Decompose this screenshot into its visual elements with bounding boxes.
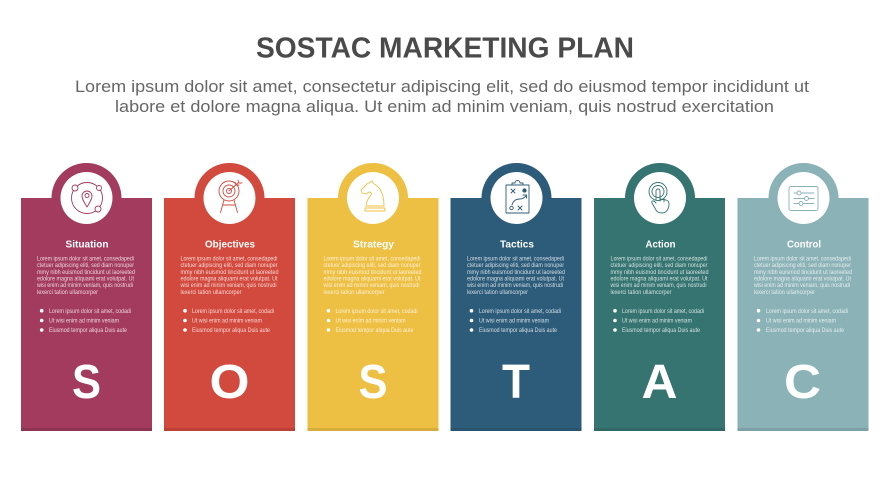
bullet list: Eiusmod tempor aliqua Duis aute <box>49 328 128 334</box>
bullet list: Lorem ipsum dolor sit amet, codadi <box>192 309 274 315</box>
panel: Control <box>738 163 868 431</box>
heading: Strategy: Strategy <box>353 240 394 250</box>
bullet list <box>470 309 561 334</box>
bullet list <box>40 309 131 334</box>
bullet list <box>757 309 848 334</box>
letter T: T <box>502 356 530 409</box>
panel: Objectives <box>164 163 295 431</box>
body text <box>753 256 852 296</box>
bullet list: Ut wisi enim ad minim veniam <box>479 318 549 324</box>
body text: mmy nibh euismod tincidunt ut laoreeted <box>180 270 278 276</box>
bullet list: Eiusmod tempor aliqua Duis aute <box>622 328 701 334</box>
body text: mmy nibh euismod tincidunt ut laoreeted <box>324 270 422 276</box>
icon: clipboard plan <box>506 181 529 213</box>
heading: Situation: Situation <box>66 240 108 250</box>
body text: lexerci tation ullamcorper <box>180 290 242 296</box>
body text: mmy nibh euismod tincidunt ut laoreeted <box>467 270 565 276</box>
subtitle: Lorem ipsum dolor sit amet, consectetur adipiscing elit, sed do eiusmod tempor incididunt ut <box>75 77 809 96</box>
letter S: S <box>358 356 388 409</box>
body text: edolore magna aliquami erat volutpat. Ut <box>467 276 564 282</box>
icon: chess knight <box>361 181 385 211</box>
bullet list <box>183 309 274 334</box>
body text: lexerci tation ullamcorper <box>324 290 384 296</box>
bullet list: Ut wisi enim ad minim veniam <box>49 318 119 324</box>
letter S: S <box>72 356 101 409</box>
body text: lexerci tation ullamcorper <box>467 290 528 296</box>
bullet list: Ut wisi enim ad minim veniam <box>336 318 406 324</box>
body text <box>323 256 422 296</box>
body text <box>466 256 565 296</box>
bullet list: Lorem ipsum dolor sit amet, codadi <box>766 309 848 315</box>
bullet list: Eiusmod tempor aliqua Duis aute <box>479 328 558 334</box>
letter A: A <box>642 356 678 409</box>
icon: location orbit <box>72 182 102 214</box>
body text <box>36 256 135 296</box>
body text: wisi enim ad minim veniam, quis nostrudi <box>753 283 850 289</box>
panel: Strategy <box>308 163 438 431</box>
bullet list: Lorem ipsum dolor sit amet, codadi <box>622 309 704 315</box>
subtitle: labore et dolore magna aliqua. Ut enim ad minim veniam, quis nostrud exercitation <box>115 97 774 116</box>
icon: touch hand <box>649 182 669 213</box>
body text: lexerci tation ullamcorper <box>610 290 672 296</box>
body text: lexerci tation ullamcorper <box>754 290 815 296</box>
body text: wisi enim ad minim veniam, quis nostrudi <box>180 283 276 289</box>
body text: ctetuer adipiscing eliti, sed diam nonuper <box>754 263 851 269</box>
bullet list: Ut wisi enim ad minim veniam <box>766 318 836 324</box>
bullet list <box>327 309 418 334</box>
body text: ctetuer adipiscing eliti, sed diam nonuper <box>610 263 708 269</box>
body text: edolore magna aliquami erat volutpat. Ut <box>754 276 851 282</box>
body text: Lorem ipsum dolor sit amet, consedapedi <box>754 256 851 262</box>
body text <box>610 256 708 296</box>
body text: Lorem ipsum dolor sit amet, consedapedi <box>324 256 420 262</box>
panel: Situation <box>21 163 152 431</box>
bullet list: Lorem ipsum dolor sit amet, codadi <box>49 309 131 315</box>
body text: edolore magna aliquami erat volutpat. Ut <box>37 276 134 282</box>
icon: sliders panel <box>789 186 818 210</box>
body text <box>180 256 278 296</box>
body text: ctetuer adipiscing eliti, sed diam nonuper <box>467 263 564 269</box>
body text: mmy nibh euismod tincidunt ut laoreeted <box>37 270 135 276</box>
body text: mmy nibh euismod tincidunt ut laoreeted <box>610 270 708 276</box>
bullet list: Lorem ipsum dolor sit amet, codadi <box>479 309 561 315</box>
bullet list: Lorem ipsum dolor sit amet, codadi <box>336 309 418 315</box>
body text: ctetuer adipiscing eliti, sed diam nonuper <box>324 263 420 269</box>
heading: Tactics: Tactics <box>500 240 534 250</box>
body text: Lorem ipsum dolor sit amet, consedapedi <box>180 256 278 262</box>
body text: ctetuer adipiscing eliti, sed diam nonuper <box>180 263 278 269</box>
bullet list: Eiusmod tempor aliqua Duis aute <box>766 328 845 334</box>
body text: edolore magna aliquami erat volutpat. Ut <box>610 276 708 282</box>
body text: wisi enim ad minim veniam, quis nostrudi <box>466 283 563 289</box>
heading: Control: Control <box>787 240 821 250</box>
body text: ctetuer adipiscing eliti, sed diam nonuper <box>37 263 134 269</box>
bullet list <box>613 309 704 334</box>
subtitle <box>75 77 809 116</box>
letter C: C <box>784 356 821 409</box>
body text: wisi enim ad minim veniam, quis nostrudi <box>323 283 420 289</box>
bullet list: Ut wisi enim ad minim veniam <box>192 318 262 324</box>
bullet list: Ut wisi enim ad minim veniam <box>622 318 692 324</box>
panel: Tactics <box>450 163 582 431</box>
letter O: O <box>210 356 250 409</box>
title: SOSTAC MARKETING PLAN <box>256 32 634 64</box>
icon: target <box>219 180 242 212</box>
bullet list: Eiusmod tempor aliqua Duis aute <box>192 328 271 334</box>
panel: Action <box>594 163 725 431</box>
body text: edolore magna aliquami erat volutpat. Ut <box>180 276 278 282</box>
heading: Action: Action <box>646 240 676 250</box>
heading: Objectives: Objectives <box>205 240 255 250</box>
body text: lexerci tation ullamcorper <box>37 290 98 296</box>
body text: edolore magna aliquami erat volutpat. Ut <box>324 276 421 282</box>
body text: wisi enim ad minim veniam, quis nostrudi <box>36 283 133 289</box>
bullet list: Eiusmod tempor aliqua Duis aute <box>336 328 414 334</box>
body text: Lorem ipsum dolor sit amet, consedapedi <box>37 256 134 262</box>
body text: Lorem ipsum dolor sit amet, consedapedi <box>467 256 564 262</box>
body text: Lorem ipsum dolor sit amet, consedapedi <box>610 256 708 262</box>
body text: wisi enim ad minim veniam, quis nostrudi <box>610 283 706 289</box>
body text: mmy nibh euismod tincidunt ut laoreeted <box>754 270 852 276</box>
